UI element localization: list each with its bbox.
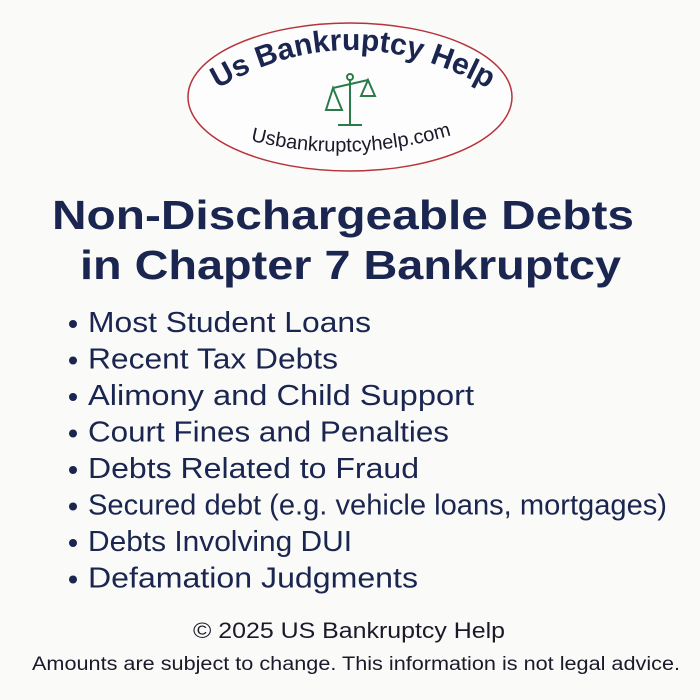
icon: scales <box>326 74 375 125</box>
logo name: Us Bankruptcy Help <box>209 30 493 88</box>
item: student loans: Most Student Loans <box>88 307 371 339</box>
logo <box>187 22 513 172</box>
footer <box>32 618 680 675</box>
logo oval <box>188 23 512 171</box>
item: secured debt: Secured debt (e.g. vehicle loans, mortgages) <box>88 490 667 522</box>
title <box>52 192 634 288</box>
item: fines: Court Fines and Penalties <box>88 416 449 448</box>
item: DUI: Debts Involving DUI <box>88 526 352 558</box>
item: fraud: Debts Related to Fraud <box>88 453 419 485</box>
item: defamation: Defamation Judgments <box>88 562 418 594</box>
item: alimony: Alimony and Child Support <box>88 380 474 412</box>
item: tax debts: Recent Tax Debts <box>88 344 338 376</box>
title: in Chapter 7 Bankruptcy <box>80 242 621 288</box>
copyright: © 2025 US Bankruptcy Help <box>193 618 505 643</box>
disclaimer: Amounts are subject to change. This information is not legal advice. <box>32 654 680 675</box>
list of non-dischargeable debts <box>69 307 667 594</box>
title: Non-Dischargeable Debts <box>52 192 634 238</box>
logo url: Usbankruptcyhelp.com <box>252 126 450 156</box>
